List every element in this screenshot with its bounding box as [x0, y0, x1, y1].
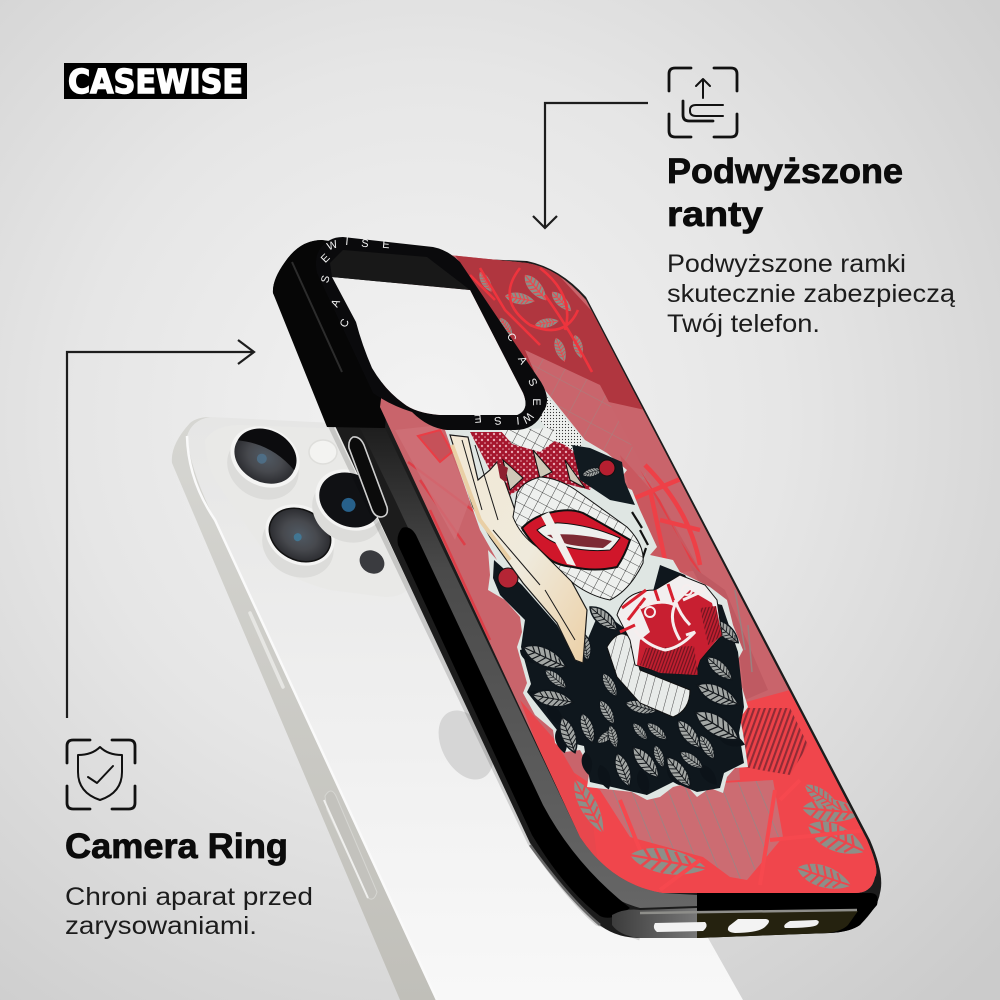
right red swirl — [620, 455, 700, 575]
usb port — [728, 919, 769, 933]
logo: casewise: CASEWISE — [68, 62, 243, 101]
text: raised edges description: skutecznie zabezpieczą — [667, 280, 955, 308]
power button — [324, 791, 377, 899]
teal leaves bottom — [574, 780, 864, 889]
heading: camera ring: Camera Ring — [65, 827, 288, 866]
pattern top right — [455, 255, 645, 410]
rose — [617, 575, 722, 675]
outer bottom edge sheen — [530, 845, 600, 925]
white phone — [172, 414, 743, 1000]
lens window — [332, 277, 525, 415]
phone case — [273, 240, 881, 938]
spikes — [503, 450, 585, 490]
arrow: raised edges — [533, 103, 648, 228]
black side stripe — [398, 527, 630, 918]
ring lettering: W — [519, 409, 535, 426]
heading: raised edges: Podwyższone — [667, 152, 903, 191]
arrow: camera ring — [67, 340, 254, 718]
hatched dark leaf right — [742, 708, 807, 775]
lens right — [299, 457, 399, 555]
illustration sticker — [445, 390, 748, 800]
black leaves — [517, 646, 747, 797]
ring lettering: E — [382, 239, 390, 251]
text: raised edges description: Podwyższone ramki — [667, 250, 906, 278]
inner bevel — [330, 250, 470, 290]
small rose top — [572, 445, 635, 505]
ring lettering: A — [329, 297, 343, 309]
ring frame — [316, 237, 547, 430]
icon: raised edges — [669, 68, 737, 137]
grey leaves — [519, 602, 744, 791]
ring lettering: C — [504, 331, 518, 344]
lower bright veins — [618, 790, 864, 875]
sensor — [355, 546, 389, 578]
dotted shoulder — [540, 392, 582, 470]
phone back — [187, 417, 743, 1000]
red cloth — [470, 432, 598, 495]
flash — [309, 440, 337, 464]
mic hole — [784, 920, 819, 928]
case artwork panel — [370, 240, 890, 900]
soft case shadow — [330, 425, 640, 938]
red ornament left — [418, 430, 452, 462]
ring lettering: S — [319, 274, 333, 284]
ring lettering: C — [338, 317, 352, 330]
lower red field — [555, 690, 890, 900]
ring lettering: E — [530, 398, 542, 406]
bottom lip left — [612, 908, 697, 938]
left bright streak — [408, 462, 490, 640]
left edge highlight — [292, 262, 342, 372]
bottom lip right — [697, 893, 878, 938]
bottom highlight — [640, 910, 857, 913]
inner side band — [360, 428, 697, 908]
ring lettering: A — [515, 354, 529, 367]
text: camera ring description — [65, 883, 313, 940]
disco ball upper — [513, 477, 643, 600]
disco ball lower — [607, 634, 690, 717]
disco top fragment — [500, 428, 556, 452]
leaves bouquet base — [493, 560, 744, 795]
right salmon leaf — [690, 565, 768, 700]
case body — [273, 240, 881, 938]
lens bottom — [249, 492, 349, 590]
ring lettering: S — [361, 238, 369, 250]
ring lettering — [319, 236, 542, 426]
lips — [522, 510, 630, 570]
icon: shield — [67, 740, 135, 809]
left pale panel — [395, 425, 470, 540]
text: camera ring description: Chroni aparat przed — [65, 883, 313, 911]
ring lettering: I — [516, 414, 520, 426]
ring lettering: S — [494, 414, 502, 426]
ring lettering: S — [525, 377, 539, 388]
bottom lip olive — [697, 911, 858, 938]
text: raised edges description: Twój telefon. — [667, 310, 820, 338]
text: raised edges description — [667, 250, 955, 338]
camera ring — [316, 236, 547, 430]
ring lettering: I — [345, 236, 349, 248]
music notes — [630, 512, 648, 560]
panel base — [370, 240, 890, 900]
upper dark shell — [273, 240, 400, 428]
side highlight — [187, 436, 437, 1000]
bright lines top — [469, 267, 593, 372]
lower-left red — [520, 700, 598, 859]
heading: raised edges: ranty — [667, 195, 764, 234]
hand and arm — [450, 435, 587, 663]
volume button — [250, 613, 283, 687]
lens top — [214, 414, 314, 512]
web grid upper right — [525, 350, 655, 490]
camera control button — [349, 437, 387, 517]
heading: raised edges — [667, 152, 903, 234]
speaker hole — [654, 922, 707, 932]
apple logo shadow — [427, 701, 505, 789]
text: camera ring description: zarysowaniami. — [65, 912, 257, 940]
ring lettering: E — [474, 412, 482, 424]
small rose left — [498, 568, 518, 588]
ring lettering: E — [319, 252, 333, 266]
ring lettering: W — [325, 238, 340, 253]
sticker outline — [445, 390, 748, 800]
lower center grid — [600, 780, 783, 880]
phone side band — [172, 417, 437, 1000]
camera plateau — [205, 425, 420, 597]
top background leaves — [476, 270, 586, 363]
